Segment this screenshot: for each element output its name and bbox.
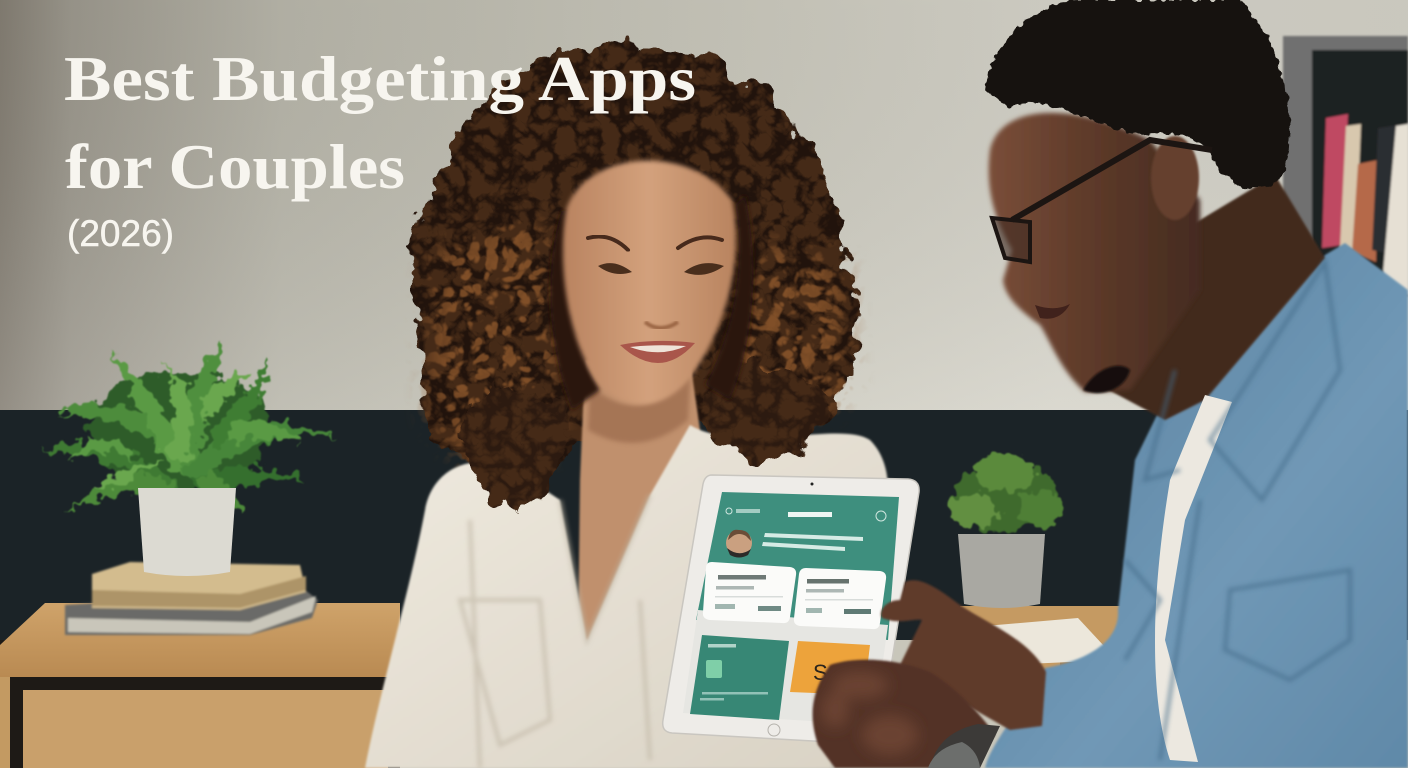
home button [768, 724, 780, 736]
hair highlights [430, 200, 850, 500]
top app bar [726, 508, 886, 521]
neck shadow [588, 375, 690, 443]
shirt shading [460, 495, 650, 768]
left desk [0, 603, 400, 768]
face [563, 160, 736, 404]
small pot [958, 534, 1045, 608]
left plant with pot [38, 340, 336, 576]
eyes [598, 263, 724, 275]
title line 2: for Couples [65, 131, 405, 202]
smile [620, 341, 695, 363]
hair back [412, 44, 855, 506]
neck and chest [578, 360, 700, 645]
shirt [365, 425, 888, 768]
right hand holding tablet [881, 580, 1046, 730]
face [989, 113, 1200, 392]
man's hands and watch [813, 580, 1046, 768]
woman [365, 44, 888, 768]
ear [1151, 136, 1199, 220]
hair [985, 0, 1290, 188]
bottom orange card: S [813, 660, 828, 685]
bottom orange card [790, 641, 870, 695]
intro text lines [762, 533, 863, 551]
dark wainscot panel [0, 410, 1408, 640]
t-shirt [1155, 395, 1232, 762]
bookshelf with books [1283, 36, 1408, 296]
hair around face [550, 195, 753, 410]
app card right [794, 568, 886, 629]
nose [645, 322, 678, 328]
right desk [960, 606, 1130, 680]
jacket [985, 243, 1408, 768]
hair front locks [452, 360, 830, 511]
beard [1083, 366, 1130, 393]
eyebrows [588, 236, 722, 250]
pot [138, 488, 236, 576]
screen top green [696, 492, 899, 640]
screen lower white [683, 610, 888, 725]
tablet [663, 475, 919, 744]
left hand [813, 660, 995, 768]
bottom green card [690, 635, 789, 720]
knuckle highlights [821, 671, 918, 755]
camera dot [810, 482, 814, 486]
tablet body [663, 475, 919, 744]
glasses [992, 140, 1212, 262]
title line 1: Best Budgeting Apps [64, 43, 696, 114]
wrist watch [928, 724, 1000, 768]
neck [1090, 175, 1325, 420]
year: (2026) [67, 213, 174, 254]
title [64, 43, 696, 254]
paper on desk [985, 618, 1117, 664]
leaves [38, 340, 336, 515]
plant foliage [951, 452, 1062, 533]
man [985, 0, 1408, 768]
app card left [703, 562, 796, 623]
mouth [1035, 304, 1070, 319]
right plant with pot [951, 452, 1062, 608]
collar and pockets [1125, 262, 1350, 760]
stacked books [65, 562, 318, 635]
avatar [726, 530, 752, 558]
background wall [0, 0, 1408, 420]
